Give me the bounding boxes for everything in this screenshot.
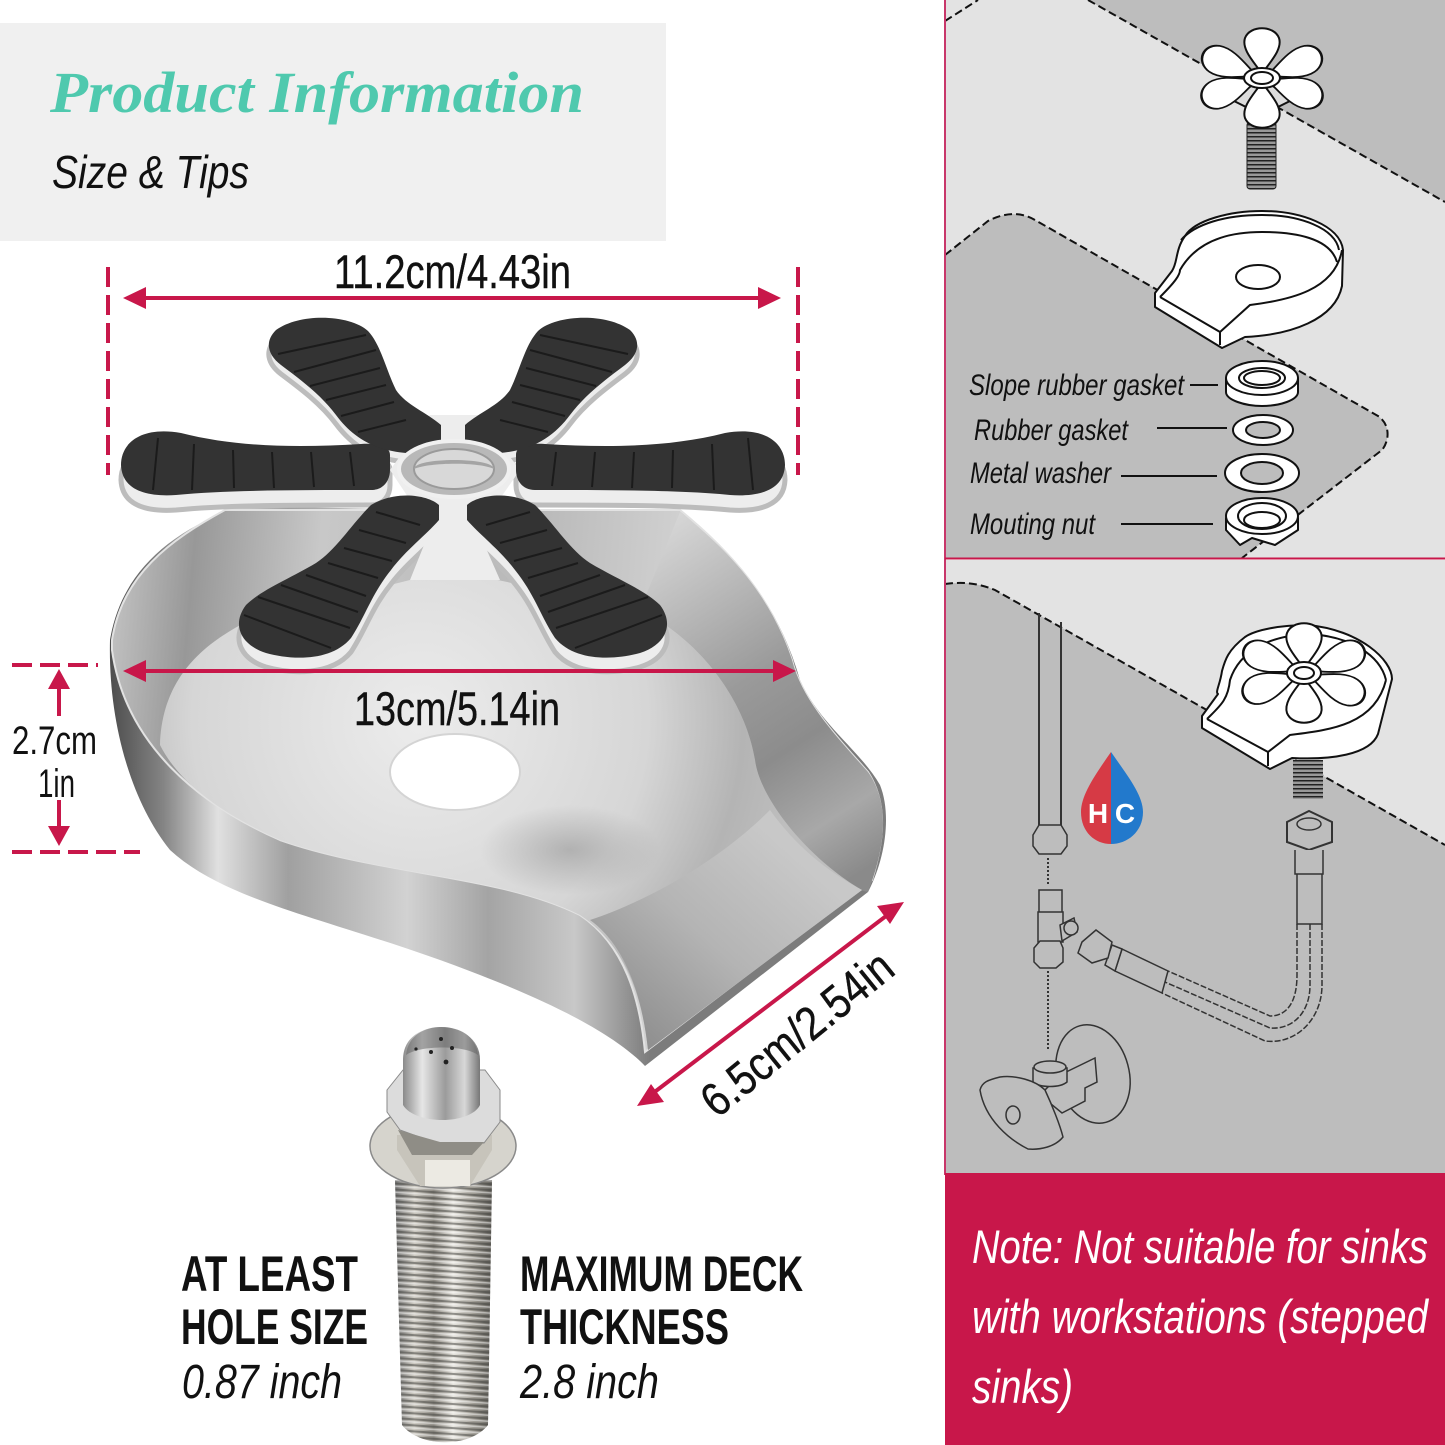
tray outer wall <box>110 506 886 1066</box>
label: metal washer: Metal washer <box>970 457 1112 490</box>
tray floor <box>160 570 862 1050</box>
product photo: stainless rinser tray <box>110 318 886 1066</box>
label: mounting nut <box>970 498 1298 545</box>
icon: cold and hot water drop <box>1081 752 1143 844</box>
icon: spray flower <box>1197 28 1327 128</box>
label: mounting nut: Mouting nut <box>970 508 1096 541</box>
tray inner wall <box>112 510 882 1052</box>
icon: angle valve <box>980 1016 1141 1149</box>
dividers <box>945 0 1445 1175</box>
bolt nozzle cap <box>403 1027 480 1120</box>
text: deck thickness: MAXIMUM DECK <box>520 1246 803 1302</box>
icon: tee fitting <box>1034 890 1078 968</box>
product photo: threaded bolt <box>370 1027 516 1442</box>
icon: assembled tray <box>1202 623 1392 769</box>
label: rubber gasket: Rubber gasket <box>974 414 1129 447</box>
label: slope rubber gasket: Slope rubber gasket <box>969 369 1185 402</box>
text: hole size: AT LEAST <box>181 1246 358 1302</box>
text: hole size: 0.87 inch <box>182 1356 342 1409</box>
label: rubber gasket <box>974 414 1293 447</box>
dimension: spout 6.5cm <box>637 902 904 1127</box>
icon: mini thread <box>1293 760 1323 799</box>
tray spout floor <box>590 810 862 1050</box>
label: slope rubber gasket <box>969 361 1298 406</box>
dimension: spout 6.5cm: 6.5cm/2.54in <box>690 940 904 1127</box>
icon: supply pipe and nut <box>1033 613 1067 1050</box>
dimension: height 2.7cm <box>12 665 140 852</box>
dimension: height 2.7cm: 2.7cm <box>12 719 97 763</box>
tray right wall <box>640 512 883 892</box>
bolt thread <box>395 1180 492 1442</box>
spray arm: silver base <box>121 327 785 672</box>
callout: note about stepped sinks <box>945 1173 1445 1445</box>
panel: exploded assembly diagram <box>945 0 1445 558</box>
grey background shape <box>945 583 1445 1173</box>
dimension: width 11.2cm <box>108 245 798 475</box>
callout: note about stepped sinks: sinks) <box>972 1360 1073 1413</box>
grey background shapes <box>945 0 1445 558</box>
heading: product information: Product Information <box>49 60 584 125</box>
label: metal washer <box>970 454 1299 492</box>
bolt hex nut <box>387 1070 500 1143</box>
panel: product information header <box>0 23 666 241</box>
subheading: size and tips: Size & Tips <box>52 146 249 198</box>
text: hole size <box>181 1246 368 1409</box>
text: deck thickness <box>519 1246 803 1409</box>
icon: braided hose <box>1078 811 1332 1041</box>
drain hole <box>390 734 520 810</box>
bolt flange <box>370 1104 516 1188</box>
floor shading <box>480 805 660 895</box>
text: hole size: HOLE SIZE <box>181 1299 368 1355</box>
dimension: height 2.7cm: 1in <box>38 762 75 806</box>
panel: plumbing installation diagram <box>945 560 1445 1173</box>
dimension: diameter 13cm: 13cm/5.14in <box>354 682 560 735</box>
icon: tray line drawing <box>1155 211 1343 348</box>
dimension: diameter 13cm <box>123 660 796 735</box>
spray arm: rubber petals <box>121 318 785 658</box>
text: deck thickness: THICKNESS <box>520 1299 729 1355</box>
text: deck thickness: 2.8 inch <box>519 1356 659 1409</box>
icon: mini bolt <box>1247 122 1276 189</box>
spray arm: centre hub <box>399 441 509 497</box>
icon: cold and hot water drop: H <box>1088 798 1108 829</box>
dimension: width 11.2cm: 11.2cm/4.43in <box>334 245 571 298</box>
icon: cold and hot water drop: C <box>1115 798 1135 829</box>
